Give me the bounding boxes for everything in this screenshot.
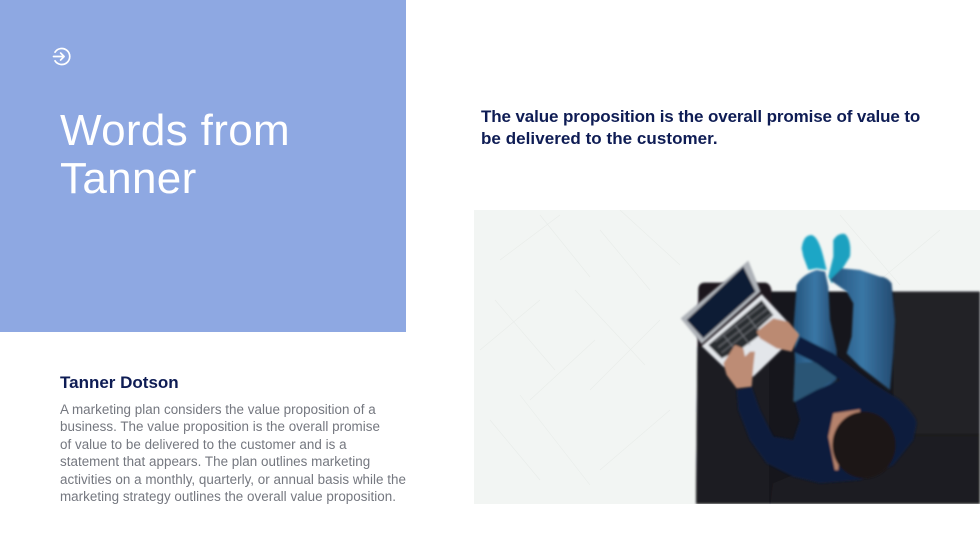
title: Words from — [60, 106, 290, 155]
title: Tanner — [60, 154, 197, 203]
quote heading — [481, 107, 920, 148]
quote heading: be delivered to the customer. — [481, 129, 718, 148]
title — [60, 106, 290, 203]
body text block: marketing strategy outlines the overall value proposition. — [60, 489, 396, 504]
body text block: A marketing plan considers the value proposition of a — [60, 402, 376, 417]
body text block: of value to be delivered to the customer and is a — [60, 437, 347, 452]
hair — [832, 412, 896, 478]
socks — [802, 235, 827, 270]
body text block — [60, 402, 406, 504]
sweater — [737, 337, 917, 483]
body text block: business. The value proposition is the overall promise — [60, 419, 380, 434]
floor — [474, 210, 980, 504]
photo: person with laptop on a sofa seen from above — [474, 210, 980, 504]
jeans — [793, 270, 837, 400]
right hand — [757, 318, 799, 352]
icon: arrow in circle — [52, 48, 71, 66]
quote heading: The value proposition is the overall promise of value to — [481, 107, 920, 126]
sofa — [696, 283, 980, 504]
laptop — [681, 261, 799, 388]
body text block: activities on a monthly, quarterly, or annual basis while the — [60, 472, 406, 487]
left hand — [723, 345, 755, 388]
neck and ear — [828, 409, 860, 470]
sofa and person — [681, 234, 980, 504]
body text block: statement that appears. The plan outlines marketing — [60, 454, 370, 469]
speaker name: Tanner Dotson — [60, 373, 179, 392]
panel: blue title block — [0, 0, 406, 332]
